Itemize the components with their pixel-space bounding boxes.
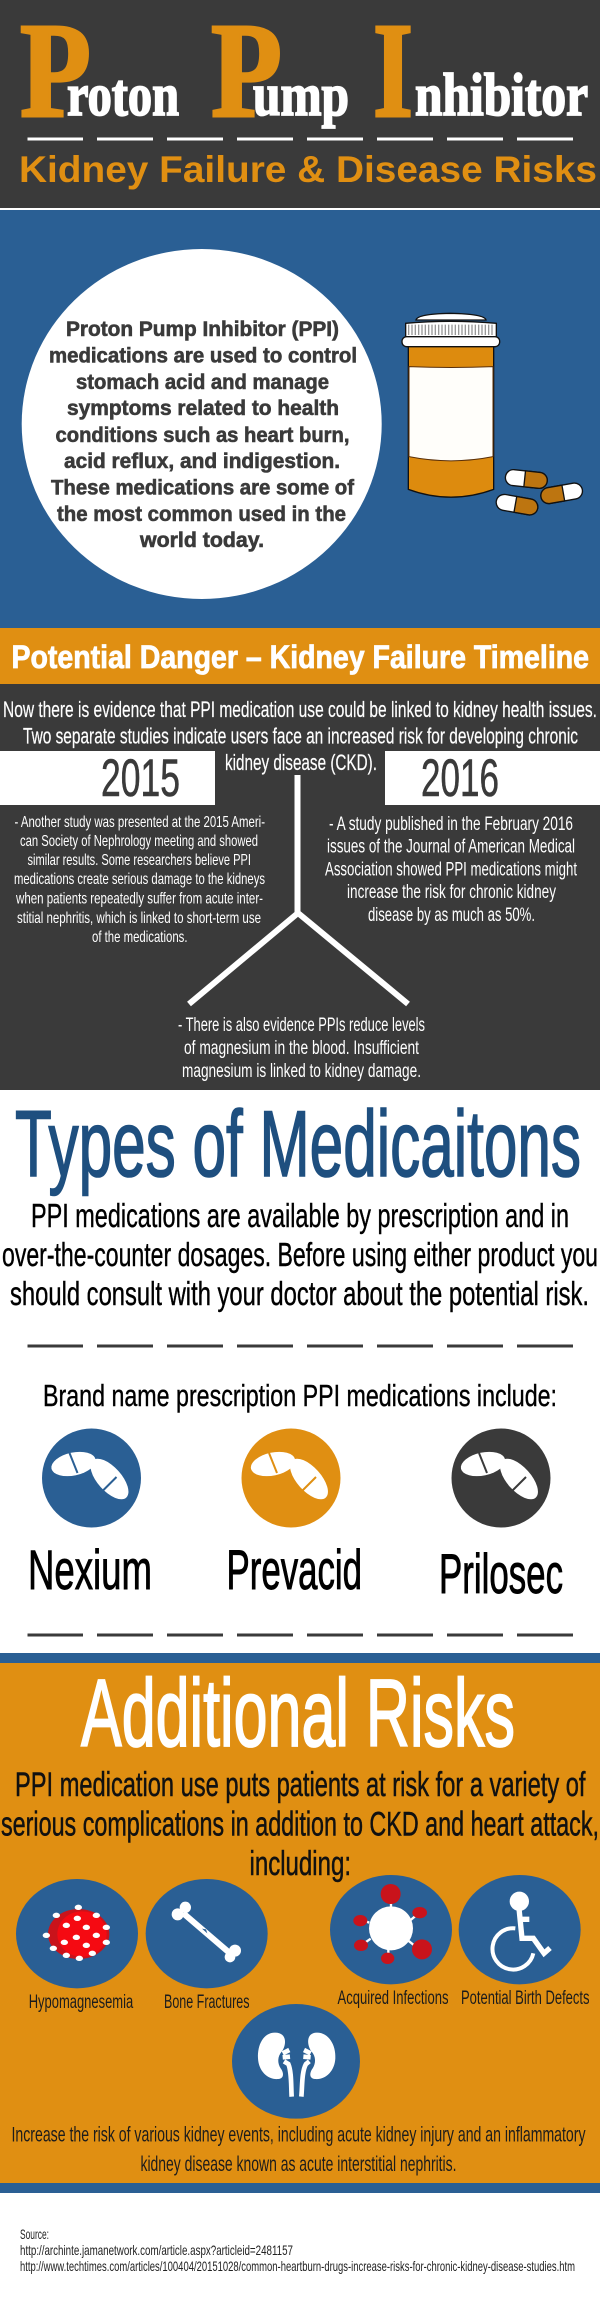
text: 2015 study: of the medications. (92, 929, 188, 946)
panel: timeline heading (0, 628, 600, 684)
title: Proton Pump Inhibitor: P (20, 0, 91, 146)
icon: pill bottle (402, 313, 584, 516)
text: 2015 study: can Society of Nephrology meeting and showed (20, 833, 258, 850)
text: magnesium: of magnesium in the blood. Insufficient (184, 1038, 420, 1059)
title: Proton Pump Inhibitor: I (373, 0, 413, 146)
icon: bone (146, 1879, 268, 1988)
icon: Prevacid pills (242, 1428, 340, 1528)
intro circle (22, 249, 382, 599)
source list (20, 2226, 575, 2274)
text: 2015 study (14, 814, 265, 946)
year 2015: 2015 (101, 749, 180, 808)
panel: intro (0, 210, 600, 628)
icon: wheelchair (459, 1875, 581, 1984)
icon: Prilosec pills (452, 1428, 550, 1528)
year 2015 (0, 749, 215, 808)
header panel (0, 0, 600, 208)
label: Acquired Infections: Acquired Infections (338, 1988, 448, 2009)
kidney risk text (12, 2124, 586, 2176)
title: Proton Pump Inhibitor: ump (253, 62, 349, 128)
text: 2015 study: similar results. Some researchers believe PPI (28, 852, 251, 869)
risks paragraph (1, 1766, 599, 1883)
risks paragraph: including: (250, 1845, 351, 1883)
intro text: stomach acid and manage (76, 371, 329, 394)
timeline branch lines (189, 775, 408, 1004)
label: Bone Fractures: Bone Fractures (164, 1992, 250, 2013)
intro text: conditions such as heart burn, (56, 424, 350, 447)
title: Proton Pump Inhibitor: roton (67, 62, 179, 128)
text: 2015 study: when patients repeatedly suffer from acute inter- (15, 890, 263, 908)
text: 2015 study: medications create serious damage to the kidneys (14, 871, 265, 888)
panel: timeline (0, 684, 600, 1090)
icon: hypomagnesemia (16, 1879, 138, 1988)
text: magnesium: magnesium is linked to kidney damage. (182, 1061, 421, 1082)
label: Nexium: Nexium (28, 1538, 152, 1601)
intro text: These medications are some of (51, 476, 355, 500)
icon: infections (330, 1875, 452, 1984)
panel: types of medications (2, 1091, 598, 1635)
text: 2015 study: - Another study was presented at the 2015 Ameri- (14, 814, 265, 831)
pill 1 (505, 469, 548, 489)
panel: additional risks (0, 1653, 600, 2193)
label: Prevacid: Prevacid (226, 1538, 362, 1601)
pill 3 (495, 493, 539, 516)
icon: Nexium pills (42, 1428, 141, 1528)
year 2016 (385, 749, 600, 808)
intro text: medications are used to control (49, 344, 357, 368)
timeline intro text: kidney disease (CKD). (225, 750, 377, 775)
title: Proton Pump Inhibitor: P (211, 0, 282, 146)
medications paragraph (2, 1197, 598, 1312)
intro text: acid reflux, and indigestion. (64, 450, 340, 473)
subtitle: Kidney Failure & Disease Risks (19, 149, 597, 190)
text: 2016 study (325, 814, 578, 926)
year 2016: 2016 (421, 749, 499, 808)
intro text: symptoms related to health (67, 397, 339, 420)
intro text: the most common used in the (57, 503, 346, 526)
title: Proton Pump Inhibitor (20, 0, 588, 146)
text: magnesium (178, 1015, 425, 1082)
intro text (49, 318, 357, 552)
text: 2015 study: stitial nephritis, which is linked to short-term use (17, 910, 261, 927)
icon: kidneys (232, 2004, 360, 2119)
intro text: Proton Pump Inhibitor (PPI) (66, 318, 339, 341)
label: Hypomagnesemia: Hypomagnesemia (29, 1992, 133, 2013)
timeline intro text (3, 697, 597, 775)
text: magnesium: - There is also evidence PPIs reduce levels (178, 1015, 425, 1036)
pill 2 (540, 482, 584, 505)
source list: http://archinte.jamanetwork.com/article.aspx?articleid=2481157 (20, 2242, 293, 2258)
intro text: world today. (139, 529, 264, 552)
source list: Source: (20, 2226, 49, 2242)
